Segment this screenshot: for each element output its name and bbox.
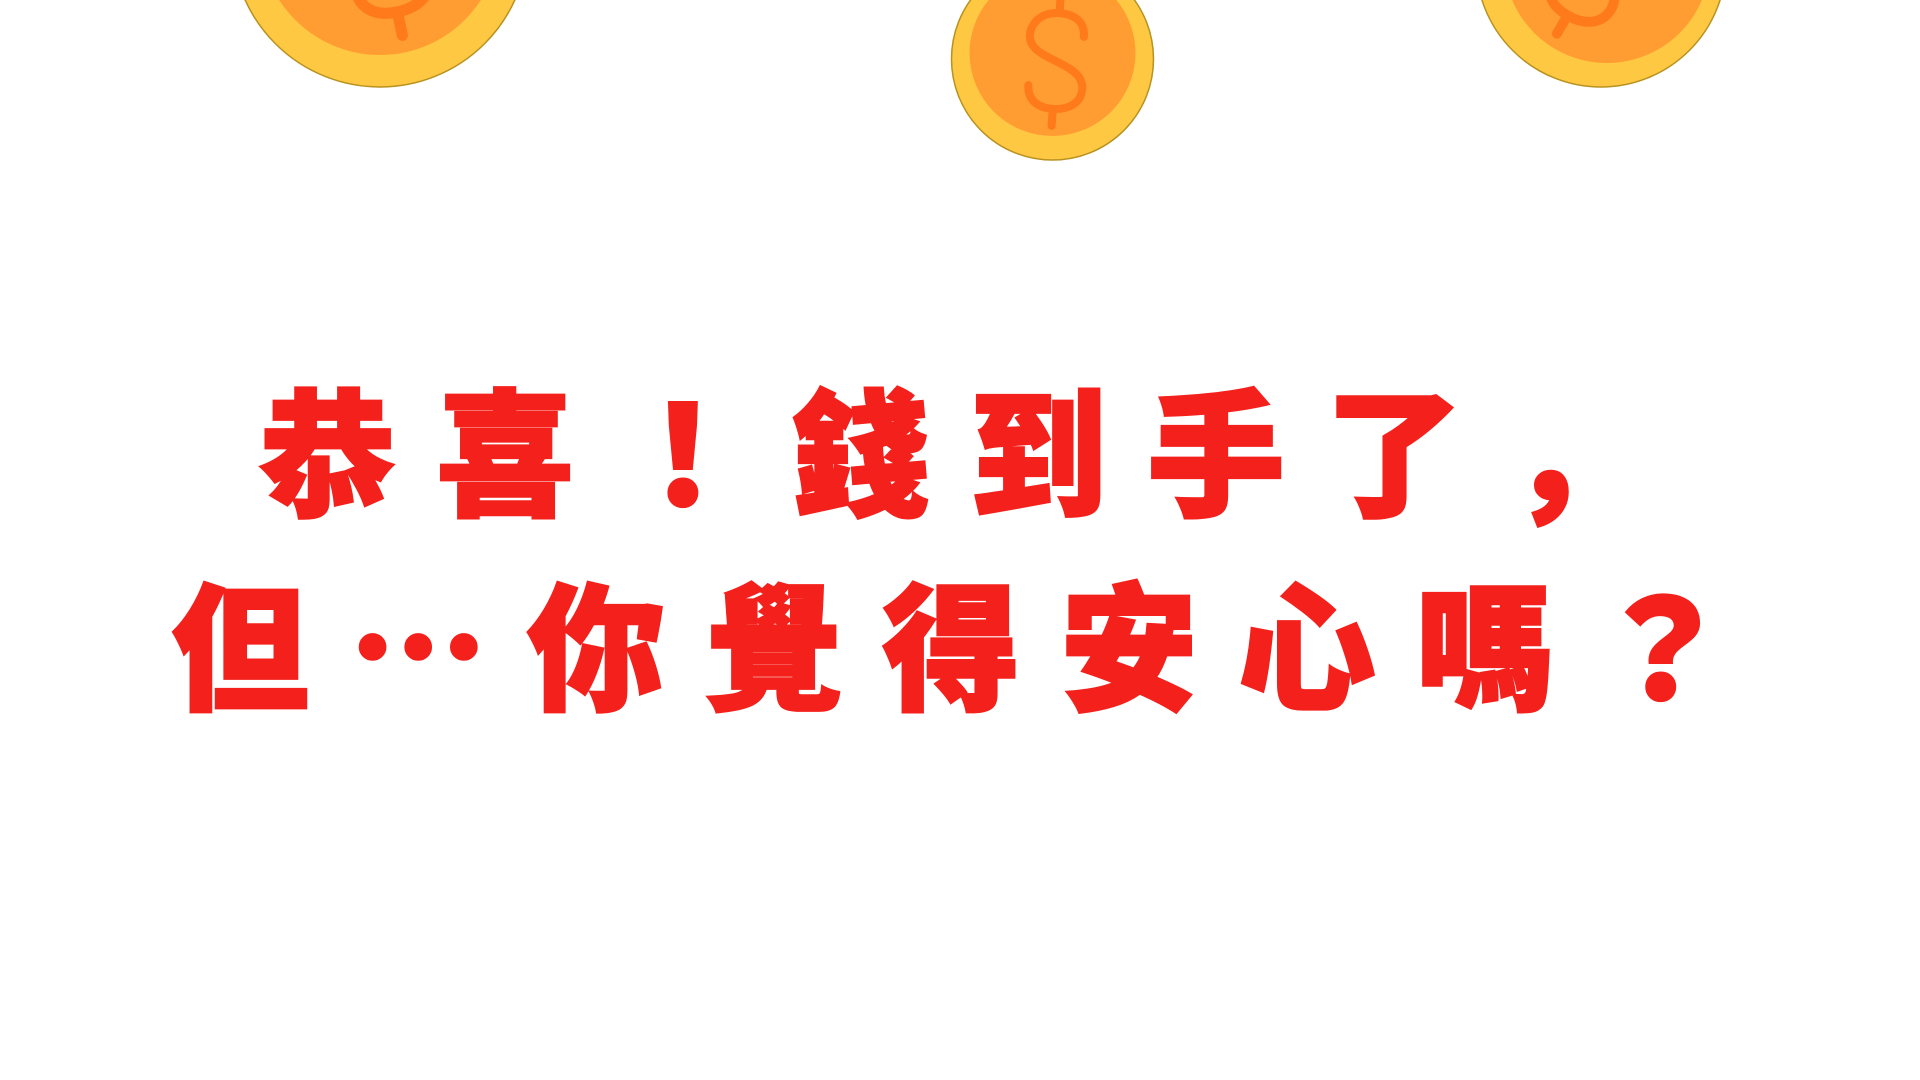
icon: right coin (1476, 0, 1726, 87)
headline line 2: 但…你覺得安心嗎？ (172, 541, 1771, 739)
icon: left coin (232, 0, 528, 87)
icon: centre coin (952, 0, 1154, 160)
headline line 1: 恭喜！錢到手了， (259, 347, 1687, 545)
coins illustration (244, 0, 1721, 161)
